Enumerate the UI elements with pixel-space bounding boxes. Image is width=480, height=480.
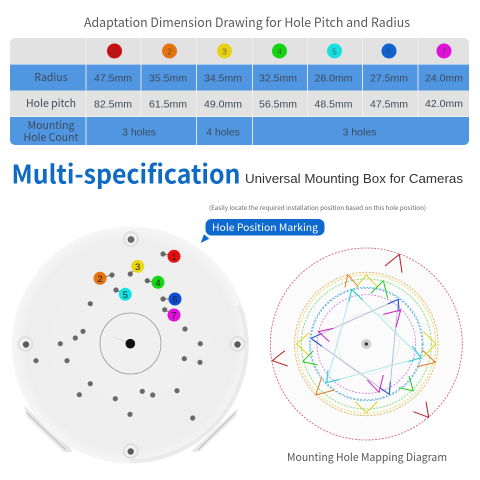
table row: radius: 24.0mm: [425, 72, 463, 84]
table row: hole pitch: 47.5mm: [370, 98, 408, 110]
side flaps: [24, 406, 238, 452]
table row: mounting hole count: [24, 118, 376, 145]
table row: mounting hole count: Hole Count: [24, 130, 79, 145]
triangle 5: cyan: [327, 289, 421, 383]
table header: numbered colour markers: 7: [442, 46, 447, 56]
hole marker 2: 2: [97, 274, 103, 285]
corner screws: [18, 231, 246, 459]
hole marker 3: [131, 260, 144, 273]
table row: radius: 47.5mm: [94, 72, 132, 84]
unmarked holes: [33, 301, 203, 421]
marks 1: red: [272, 254, 429, 417]
hole marker 1: [168, 250, 180, 263]
marks 2: orange: [316, 275, 435, 395]
callout: hole position marking: [201, 219, 324, 243]
subheading: universal mounting box: Universal Mounting Box for Cameras: [245, 172, 463, 186]
hole marker 2: [94, 272, 106, 285]
table header: numbered colour markers: [107, 44, 452, 58]
table row: mounting hole count: 3 holes: [343, 126, 376, 138]
table row: hole pitch: Hole pitch: [26, 96, 76, 111]
table row: hole pitch: 49.0mm: [204, 98, 242, 110]
table header: numbered colour markers: 5: [332, 46, 337, 56]
table row: radius: 35.5mm: [149, 72, 187, 84]
table row: hole pitch: 48.5mm: [315, 98, 353, 110]
mounting box photo: [12, 226, 249, 464]
specification table: [10, 38, 469, 145]
table row: radius: Radius: [34, 70, 68, 85]
hole marker 4: [152, 276, 164, 289]
table header: numbered colour markers: 1: [112, 46, 117, 56]
note: locate installation position: (Easily locate the required installation position based on this hole position): [209, 203, 426, 212]
hole marker 7: 7: [171, 310, 177, 322]
diagram guide circles: [270, 248, 462, 440]
triangle 6: blue: [311, 299, 399, 394]
table row: radius: [34, 70, 463, 85]
table row: mounting hole count: 3 holes: [122, 126, 156, 138]
hole marker 5: [119, 288, 132, 301]
title: adaptation dimension drawing: Adaptation Dimension Drawing for Hole Pitch and Radius: [84, 12, 410, 31]
hole marker 3: 3: [135, 262, 140, 273]
table row: hole pitch: 82.5mm: [94, 98, 132, 110]
table row: hole pitch: 42.0mm: [425, 98, 463, 110]
marks 3: yellow: [297, 275, 436, 413]
marked holes with leader lines: [100, 251, 175, 315]
table row: mounting hole count: Mounting: [28, 118, 74, 133]
hole marker 1: 1: [171, 252, 177, 263]
table row: radius: 28.0mm: [315, 72, 353, 84]
hole marker 6: 6: [172, 294, 178, 306]
hole marker 6: [168, 292, 182, 306]
mounting hole mapping diagram: [270, 248, 462, 440]
table row: radius: 27.5mm: [370, 72, 408, 84]
hole marker 5: 5: [123, 290, 128, 301]
table header: numbered colour markers: 4: [277, 46, 282, 56]
table row: radius: 34.5mm: [204, 72, 242, 84]
marks 7: magenta: [318, 310, 401, 392]
table row: hole pitch: 61.5mm: [149, 98, 187, 110]
table header: numbered colour markers: 3: [222, 46, 227, 56]
hole marker 4: 4: [155, 278, 161, 289]
centre recess: [100, 313, 161, 374]
hole marker 7: [168, 308, 180, 322]
table header: numbered colour markers: 6: [387, 46, 392, 56]
caption: mounting hole mapping diagram: Mounting Hole Mapping Diagram: [287, 450, 447, 465]
table row: mounting hole count: 4 holes: [206, 126, 240, 138]
box body: [12, 226, 249, 464]
table row: hole pitch: 56.5mm: [259, 98, 297, 110]
heading: multi-specification: Multi-specification: [12, 154, 240, 192]
diagram centre point: [361, 339, 371, 349]
table header: numbered colour markers: 2: [167, 46, 172, 56]
table row: radius: 32.5mm: [259, 72, 297, 84]
callout: hole position marking: Hole Position Marking: [212, 219, 318, 234]
table row: hole pitch: [26, 96, 463, 111]
marks 4: green: [303, 281, 413, 391]
